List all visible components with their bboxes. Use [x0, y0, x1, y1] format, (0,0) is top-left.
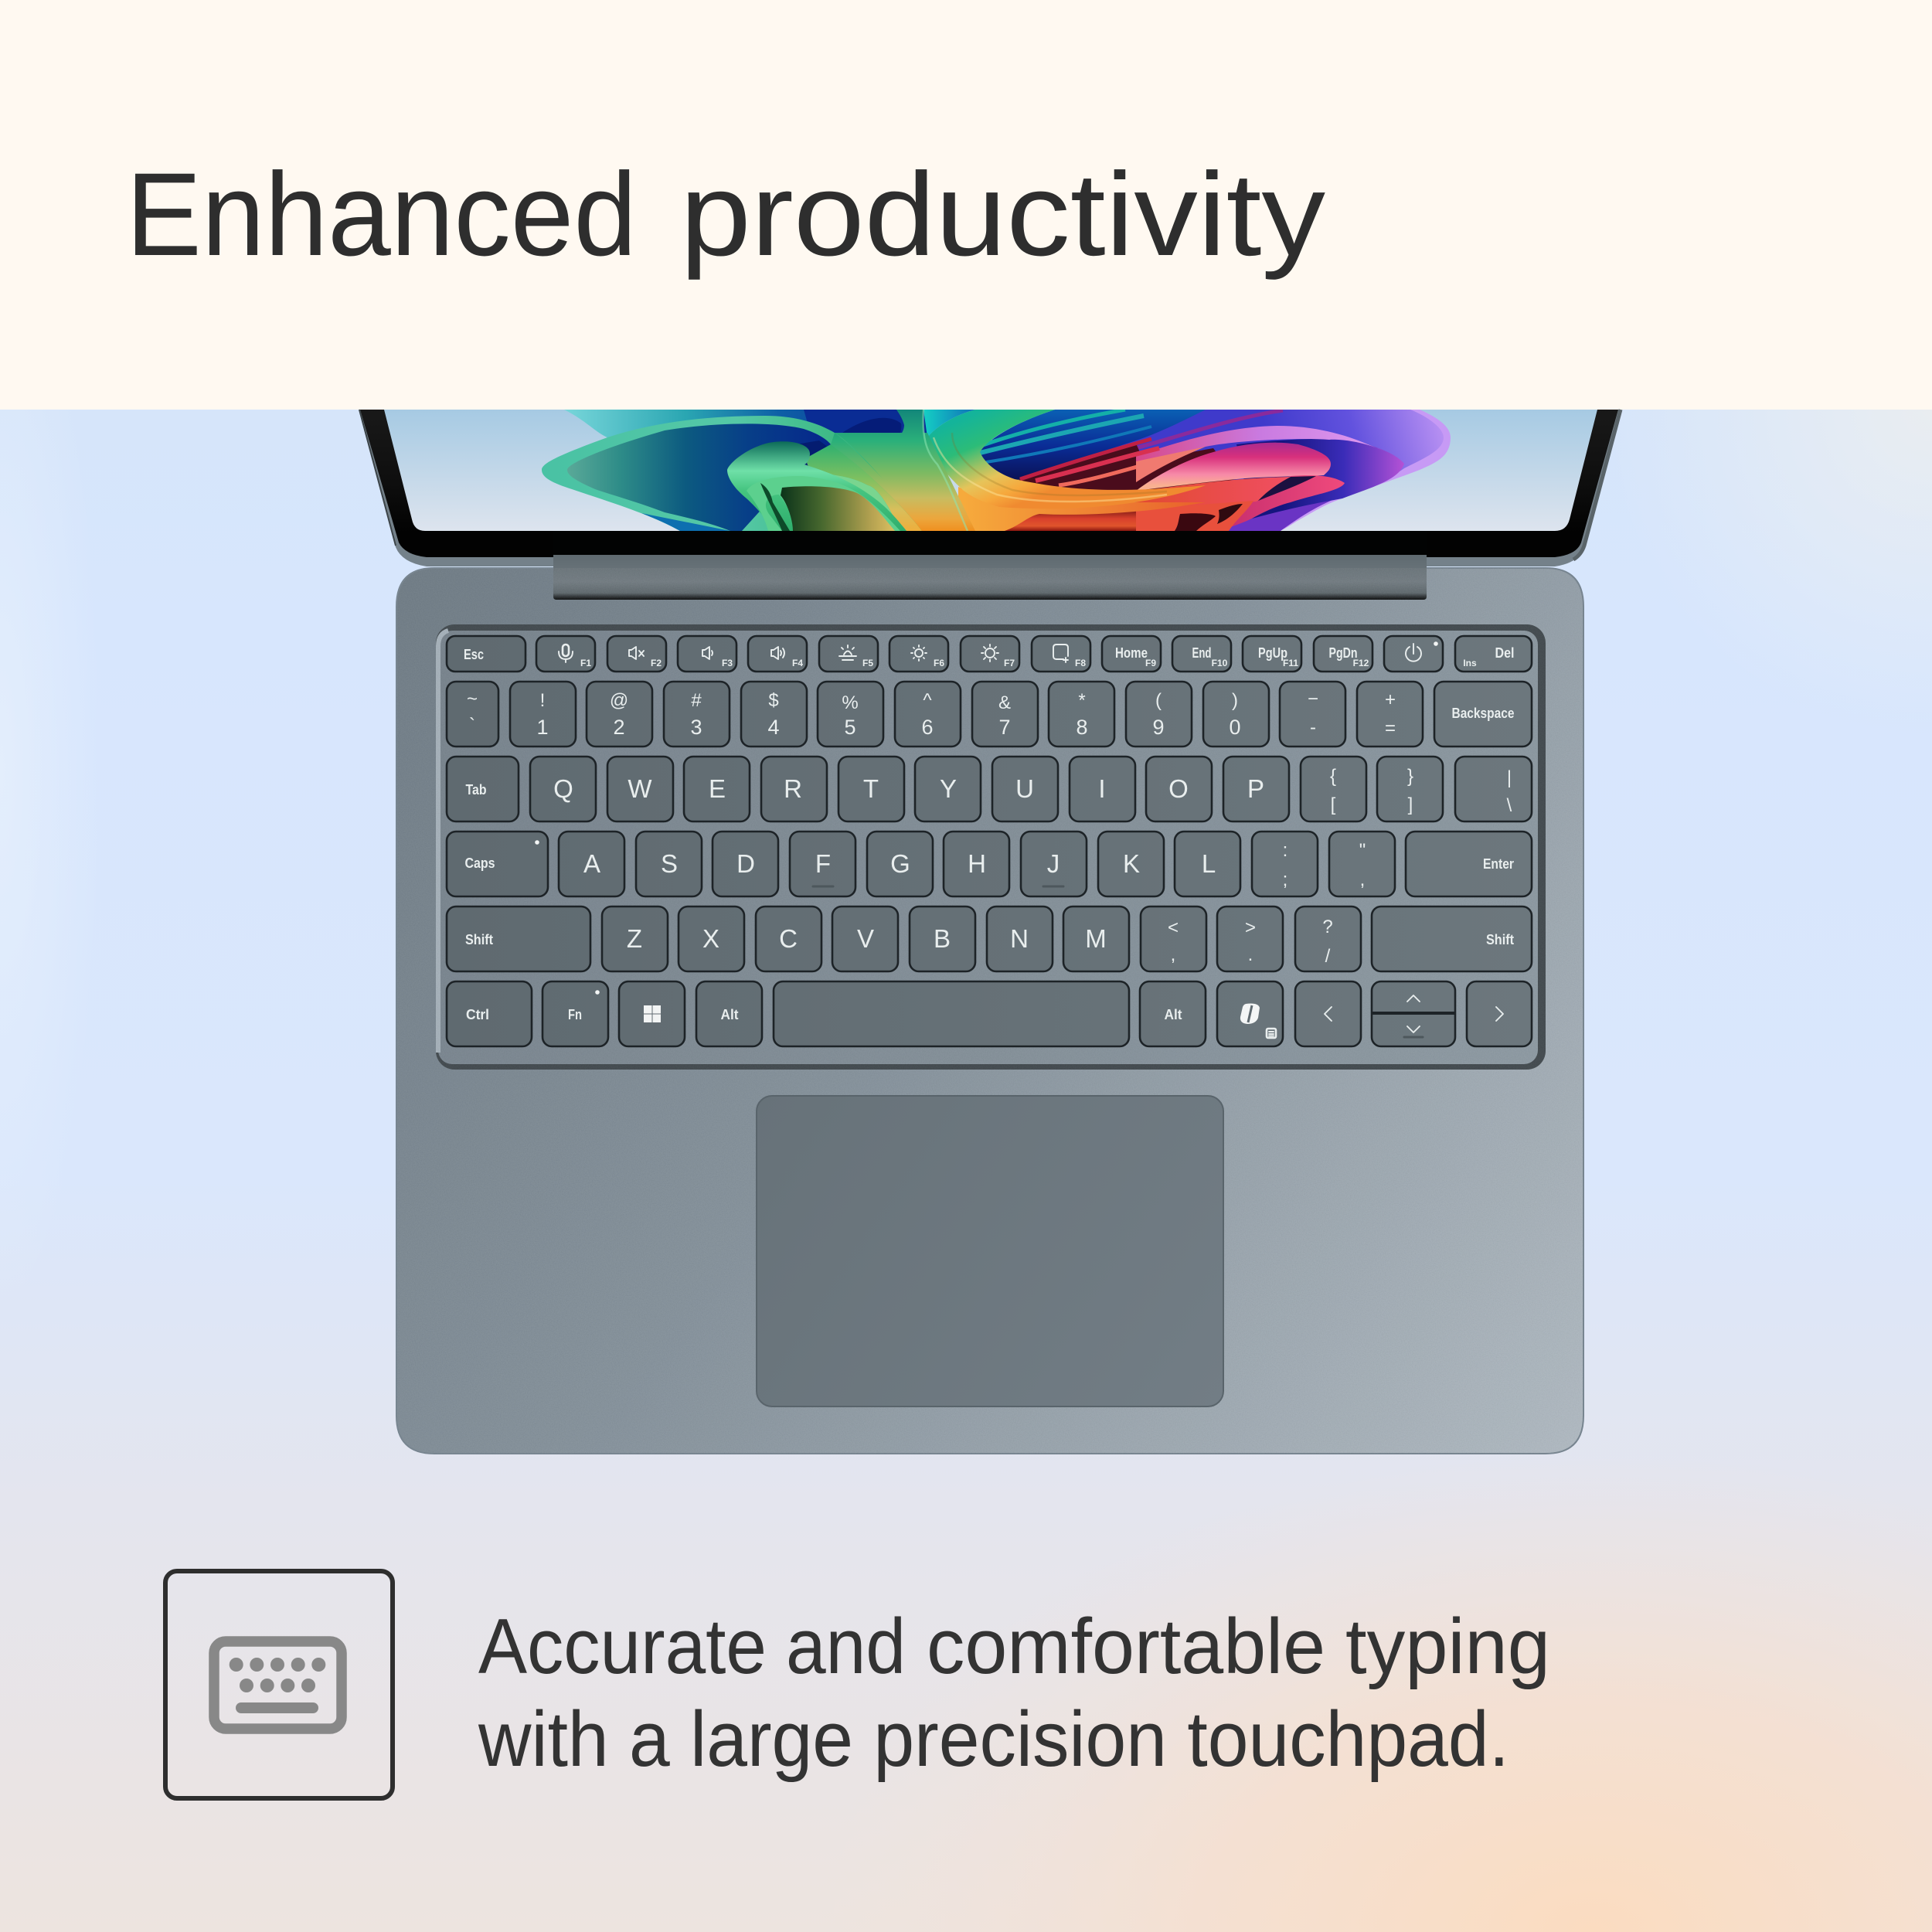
home key row: ; — [1283, 869, 1287, 890]
function key row: Ins — [1463, 658, 1477, 668]
keyboard tray — [436, 624, 1546, 1070]
screen wallpaper — [379, 410, 1607, 533]
title: productivity — [680, 148, 1326, 281]
number key row: + — [1385, 689, 1396, 710]
home key row: D — [736, 849, 755, 878]
function key row: F9 — [1145, 658, 1156, 668]
home key row: , — [1360, 869, 1365, 890]
caption text: Accurate — [478, 1604, 767, 1690]
lower letter row — [447, 906, 1532, 971]
QWERTY key row: [ — [1331, 794, 1336, 815]
lower letter row: ? — [1322, 917, 1333, 937]
F key bump — [813, 886, 833, 887]
lower letter row: Z — [627, 924, 642, 953]
keyboard keys — [447, 636, 1532, 1046]
caps lock indicator — [535, 840, 539, 845]
icon box: keyboard — [165, 1571, 393, 1798]
QWERTY key row: | — [1507, 767, 1512, 788]
QWERTY key row: T — [863, 774, 879, 803]
home key row: J — [1047, 849, 1060, 878]
function key row: F4 — [792, 658, 803, 668]
QWERTY key row: O — [1168, 774, 1189, 803]
number key row: & — [998, 692, 1011, 713]
home key row: A — [583, 849, 600, 878]
down arrow bump — [1404, 1036, 1423, 1039]
home key row: G — [890, 849, 910, 878]
function key row: F5 — [862, 658, 873, 668]
icon: Copilot — [1240, 1004, 1260, 1024]
icon: brightness down — [911, 645, 927, 661]
number key row: 4 — [767, 716, 780, 739]
icon: keyboard backlight — [839, 645, 856, 660]
home key row: S — [661, 849, 678, 878]
keyboard glyph — [214, 1641, 342, 1729]
black hinge shadow band — [553, 531, 1427, 556]
QWERTY key row: Y — [940, 774, 957, 803]
lower letter row: Shift — [465, 932, 493, 947]
bottom modifier row: Alt — [1164, 1007, 1182, 1022]
number key row: 1 — [536, 716, 549, 739]
arrow: up — [1407, 995, 1420, 1002]
title — [126, 148, 1326, 281]
background gradient — [0, 410, 1932, 1932]
caption text: and — [786, 1604, 906, 1690]
QWERTY key row: \ — [1507, 795, 1512, 816]
icon: brightness up — [981, 645, 998, 662]
icon: Windows logo — [644, 1005, 661, 1022]
number key row: 0 — [1229, 716, 1241, 739]
title: Enhanced — [126, 148, 637, 281]
number key row: - — [1310, 717, 1316, 738]
header band — [0, 0, 1932, 410]
QWERTY key row: Q — [553, 774, 573, 803]
QWERTY key row: W — [628, 774, 652, 803]
lower letter row: / — [1325, 946, 1331, 967]
lower letter row: C — [779, 924, 798, 953]
number key row: * — [1078, 690, 1086, 711]
QWERTY key row — [447, 757, 1532, 821]
function key row: Esc — [464, 647, 484, 662]
function key row: F1 — [580, 658, 591, 668]
home key row: L — [1202, 849, 1216, 878]
lower letter row: , — [1171, 944, 1175, 965]
lower letter row: V — [857, 924, 874, 953]
number key row: @ — [610, 690, 628, 711]
icon: snipping tool — [1053, 645, 1068, 662]
number key row: ) — [1232, 690, 1238, 711]
lower letter row: Shift — [1486, 932, 1514, 947]
caption text: with a large precision touchpad. — [478, 1696, 1509, 1783]
lower letter row: X — [702, 924, 719, 953]
function key row: F10 — [1212, 658, 1228, 668]
QWERTY key row: Tab — [465, 782, 487, 798]
home key row: F — [815, 849, 831, 878]
function key row: End — [1192, 645, 1212, 661]
Fn indicator — [595, 990, 600, 995]
hinge — [553, 555, 1427, 600]
number key row: Backspace — [1451, 706, 1515, 721]
J key bump — [1043, 886, 1063, 887]
number key row — [447, 682, 1532, 747]
arrow key divider — [1372, 1012, 1455, 1015]
QWERTY key row: I — [1098, 774, 1106, 803]
surface grain — [396, 568, 1583, 1454]
lower letter row: < — [1168, 917, 1179, 938]
number key row: # — [691, 690, 702, 711]
function key row: F8 — [1075, 658, 1086, 668]
home key row: H — [968, 849, 986, 878]
bottom modifier row: Ctrl — [466, 1007, 489, 1022]
lower letter row: > — [1245, 917, 1256, 938]
icon: volume down — [702, 647, 713, 659]
home key row — [447, 832, 1532, 896]
number key row: ! — [540, 690, 545, 711]
laptop lid and bezel — [359, 410, 1621, 566]
number key row: ^ — [923, 690, 932, 711]
bottom modifier row — [447, 981, 1532, 1046]
lower letter row: . — [1248, 944, 1253, 965]
icon: microphone — [559, 645, 573, 662]
function key row: F12 — [1353, 658, 1369, 668]
QWERTY key row: } — [1407, 766, 1413, 787]
number key row: ` — [469, 715, 475, 736]
number key row: 7 — [998, 716, 1011, 739]
icon: volume up — [771, 647, 784, 659]
bottom modifier row: Alt — [720, 1007, 739, 1022]
number key row: = — [1385, 718, 1396, 739]
number key row: $ — [768, 690, 779, 711]
function key row: F3 — [722, 658, 733, 668]
icon: power — [1406, 644, 1421, 662]
number key row: 6 — [921, 716, 934, 739]
arrow: right — [1496, 1007, 1503, 1021]
home key row: Enter — [1483, 856, 1514, 872]
function key row: Del — [1495, 645, 1515, 661]
arrow: down — [1407, 1026, 1420, 1032]
bottom modifier row: Fn — [568, 1007, 582, 1022]
number key row: 5 — [844, 716, 856, 739]
lower letter row: B — [934, 924, 951, 953]
number key row: − — [1308, 689, 1318, 709]
function key row: PgDn — [1329, 645, 1357, 661]
home key row: : — [1283, 840, 1287, 861]
number key row: 8 — [1076, 716, 1088, 739]
function key row: F11 — [1283, 658, 1298, 668]
laptop illustration — [359, 410, 1621, 1454]
function key row: F6 — [934, 658, 944, 668]
number key row: ( — [1155, 690, 1162, 711]
caption text: comfortable — [927, 1604, 1325, 1690]
function key row — [447, 636, 1532, 672]
QWERTY key row: { — [1330, 766, 1336, 787]
function key row: F2 — [651, 658, 662, 668]
laptop base — [396, 568, 1583, 1454]
number key row: 3 — [690, 716, 702, 739]
function key row: Home — [1115, 645, 1148, 661]
home key row: Caps — [465, 855, 495, 871]
QWERTY key row: E — [709, 774, 726, 803]
function key row: F7 — [1004, 658, 1015, 668]
home key row: K — [1123, 849, 1140, 878]
QWERTY key row: ] — [1408, 794, 1413, 815]
caption text: typing — [1345, 1604, 1550, 1690]
QWERTY key row: P — [1247, 774, 1264, 803]
caption text — [478, 1604, 1550, 1783]
lower letter row: M — [1085, 924, 1107, 953]
number key row: 2 — [613, 716, 625, 739]
icon: menu key — [1267, 1029, 1276, 1038]
power indicator — [1434, 641, 1438, 646]
icon: mute — [629, 647, 644, 659]
QWERTY key row: U — [1015, 774, 1034, 803]
arrow: left — [1325, 1007, 1332, 1021]
QWERTY key row: R — [784, 774, 802, 803]
function key row: PgUp — [1258, 645, 1287, 661]
number key row: % — [842, 692, 859, 713]
touchpad — [757, 1096, 1223, 1406]
number key row: 9 — [1152, 716, 1165, 739]
number key row: ~ — [467, 689, 478, 709]
home key row: " — [1359, 840, 1366, 861]
lower letter row: N — [1010, 924, 1029, 953]
